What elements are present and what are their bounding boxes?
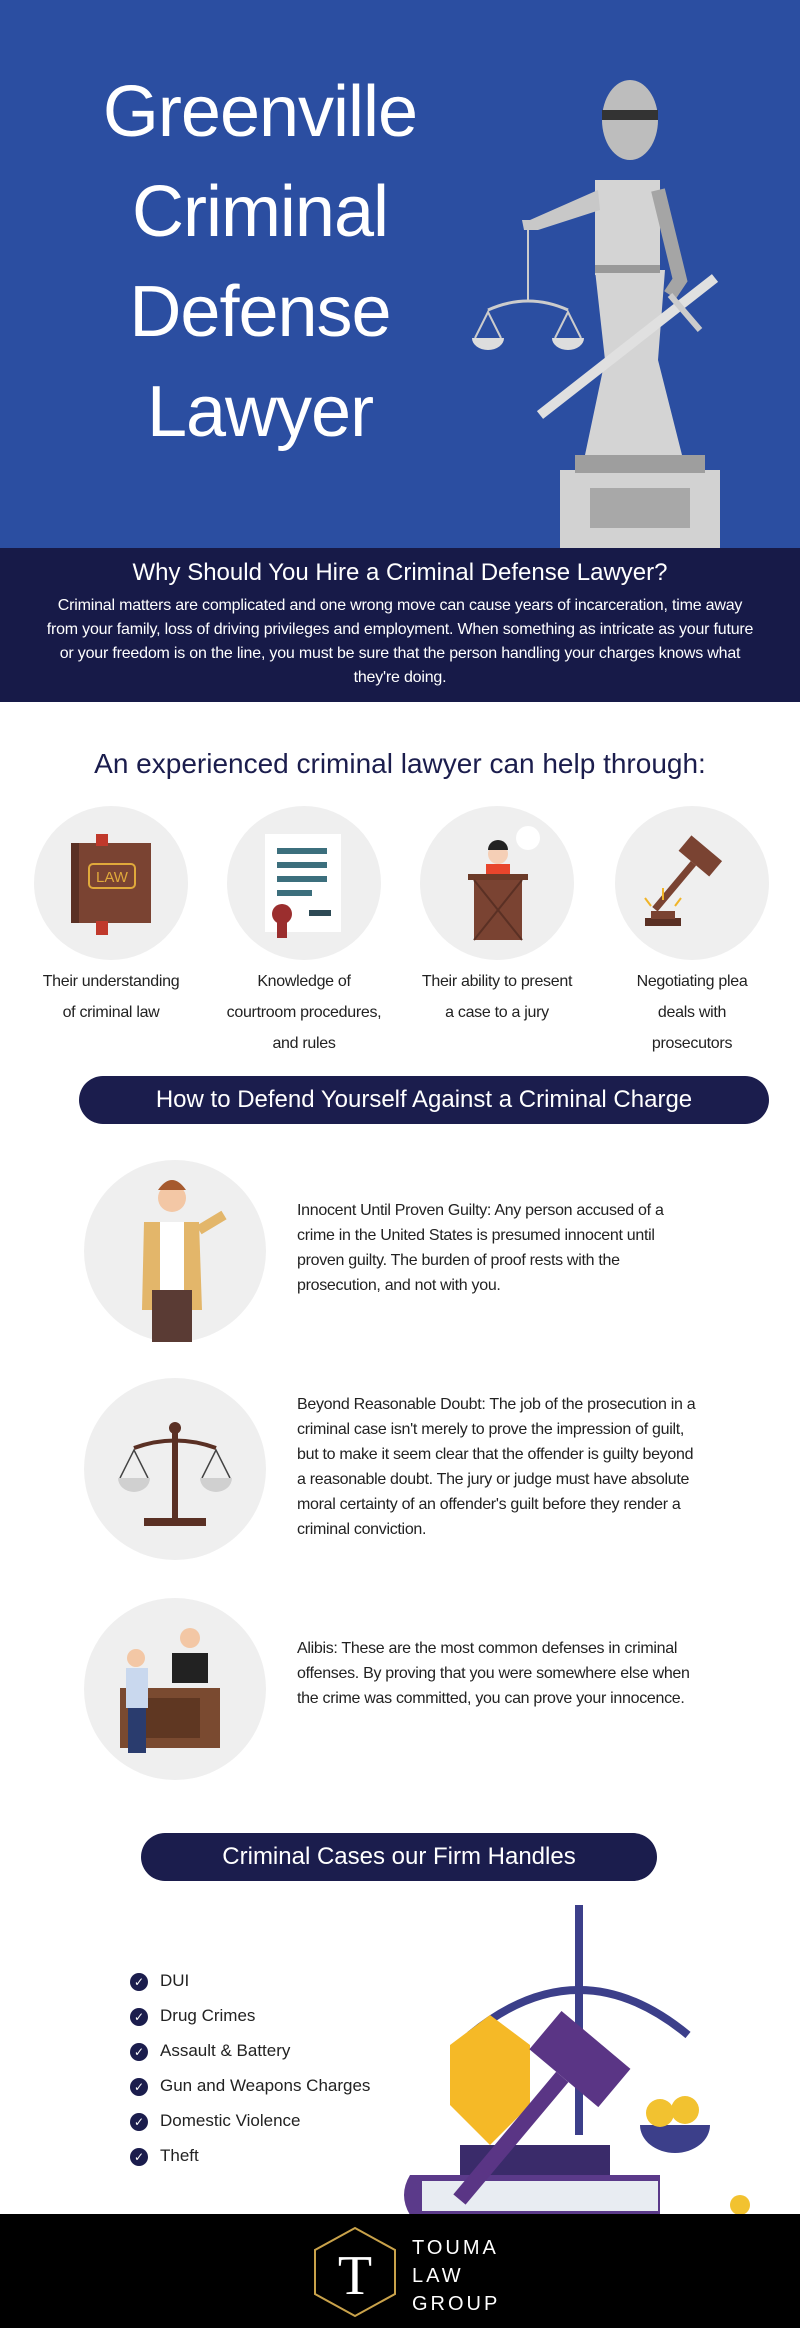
title: Greenville — [103, 72, 417, 152]
checklist: Assault & Battery — [160, 2041, 290, 2060]
checklist: Drug Crimes — [160, 2006, 255, 2025]
caption: knowledge: Knowledge of — [257, 973, 351, 990]
text block: alibis: Alibis: These are the most common defenses in criminal offenses. By proving that you were somewhere else when the crime was committed, you can prove your innocence. — [297, 1640, 690, 1707]
logo: touma law group: TOUMA — [412, 2237, 499, 2259]
heading: experienced lawyer: An experienced criminal lawyer can help through: — [94, 748, 706, 779]
checklist: ✓ — [134, 2150, 144, 2164]
checklist: DUI — [160, 1971, 189, 1990]
title: Defense — [129, 272, 391, 352]
caption: understanding: of criminal law — [63, 1004, 159, 1021]
icon: lawyer meeting — [84, 1598, 266, 1780]
icon: podium speaker — [420, 806, 574, 960]
icon: document — [227, 806, 381, 960]
checklist: ✓ — [134, 2010, 144, 2024]
title — [103, 72, 417, 452]
checklist: ✓ — [134, 1975, 144, 1989]
heading pill: how to defend: How to Defend Yourself Against a Criminal Charge — [156, 1086, 692, 1113]
checklist: ✓ — [134, 2080, 144, 2094]
caption: negotiating: deals with — [658, 1004, 726, 1021]
illustration: lady justice statue — [472, 80, 720, 548]
checklist: ✓ — [134, 2115, 144, 2129]
logo: touma law group: GROUP — [412, 2293, 500, 2315]
caption: understanding — [43, 973, 179, 1021]
logo: touma law group — [314, 2226, 500, 2318]
heading pill: how to defend — [79, 1076, 769, 1124]
caption: knowledge: courtroom procedures, — [227, 1004, 381, 1021]
text block: why hire: Criminal matters are complicated and one wrong move can cause years of incarceration, time away from your family, loss of driving privileges and employment. When something as intricate as your future or your freedom is on the line, you must be sure that the person handling your charges knows what they're doing. — [47, 597, 753, 686]
caption: negotiating — [637, 973, 748, 1052]
caption: ability — [422, 973, 572, 1021]
caption: negotiating: Negotiating plea — [637, 973, 747, 990]
icon: law book: LAW — [96, 869, 129, 886]
caption: knowledge: and rules — [272, 1035, 336, 1052]
logo: touma law group: T — [338, 2245, 372, 2307]
footer — [0, 2214, 800, 2328]
checklist — [130, 1971, 370, 2166]
checklist: Theft — [160, 2146, 199, 2165]
text block: reasonable doubt: Beyond Reasonable Doubt: The job of the prosecution in a criminal case isn't merely to prove the impression of guilt, but to make it seem clear that the offender is guilty beyond a reasonable doubt. The jury or judge must have absolute moral certainty of an offender's guilt before they render a criminal conviction. — [297, 1396, 695, 1538]
caption: negotiating: prosecutors — [652, 1035, 732, 1052]
illustration: scales gavel shield book — [404, 1905, 750, 2214]
caption: understanding: Their understanding — [43, 973, 179, 990]
caption: ability: Their ability to present — [422, 973, 572, 990]
panel: why hire — [0, 548, 800, 702]
heading: why hire: Why Should You Hire a Criminal Defense Lawyer? — [133, 559, 667, 586]
caption: knowledge — [227, 973, 381, 1052]
checklist: Gun and Weapons Charges — [160, 2076, 370, 2095]
heading pill: cases — [141, 1833, 657, 1881]
icon: man presenting — [84, 1160, 266, 1342]
hero panel — [0, 0, 800, 548]
checklist: ✓ — [134, 2045, 144, 2059]
title: Criminal — [132, 172, 388, 252]
caption: ability: a case to a jury — [445, 1004, 549, 1021]
icon: law book — [34, 806, 188, 960]
logo: touma law group: LAW — [412, 2265, 464, 2287]
icon: scales — [84, 1378, 266, 1560]
icon: gavel — [615, 806, 769, 960]
checklist: Domestic Violence — [160, 2111, 300, 2130]
text block: innocent: Innocent Until Proven Guilty: Any person accused of a crime in the United States is presumed innocent until proven guilty. The burden of proof rests with the prosecution, and not with you. — [297, 1202, 664, 1294]
heading pill: cases: Criminal Cases our Firm Handles — [222, 1843, 576, 1870]
title: Lawyer — [147, 372, 373, 452]
